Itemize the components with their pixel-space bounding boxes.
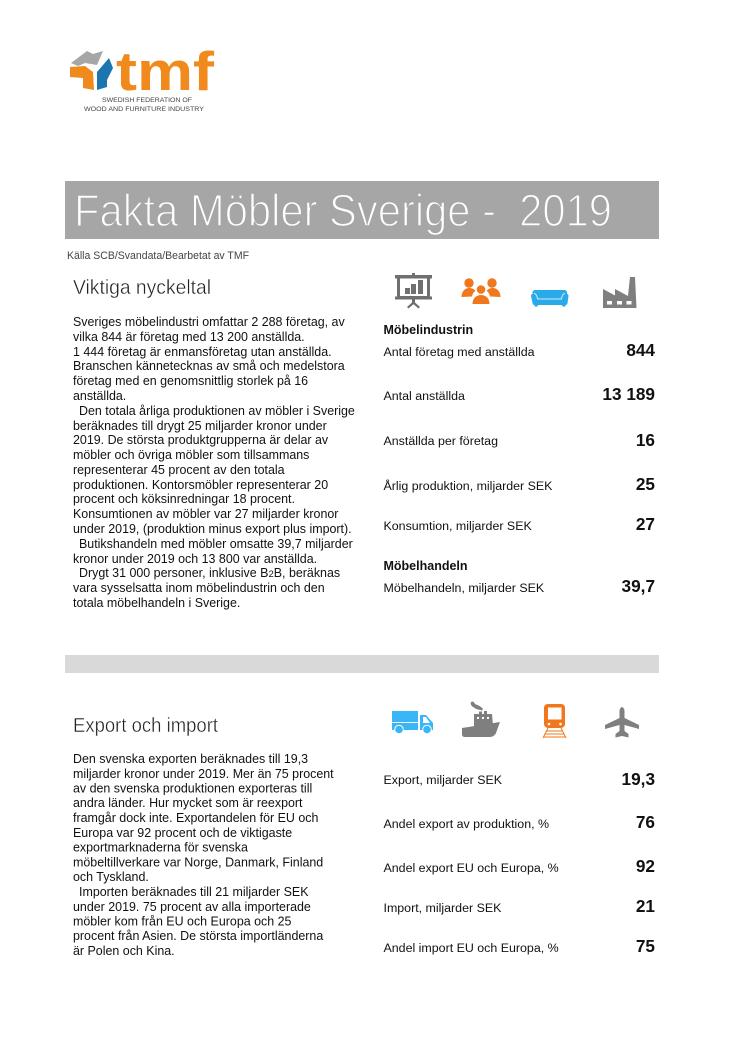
logo: tmf: tmf — [116, 40, 215, 102]
panel: export and import key figures — [384, 769, 655, 956]
heading: Export och import: Export och import — [73, 714, 218, 737]
text block: industry summary: 2019. De största produktgrupperna är delar av — [73, 433, 329, 447]
text block: industry summary: representerar 45 procent av den totala — [73, 463, 285, 477]
panel: Möbelindustrin key figures: Konsumtion, miljarder SEK — [384, 519, 532, 533]
source note: Källa SCB/Svandata/Bearbetat av TMF — [67, 250, 249, 262]
text block: industry summary: 1 444 företag är enmansföretag utan anställda. — [73, 345, 332, 359]
text block: industry summary: Sveriges möbelindustri omfattar 2 288 företag, av — [73, 315, 345, 329]
icon: train — [543, 704, 566, 738]
panel: Möbelindustrin key figures: Antal anställda — [384, 389, 465, 403]
text block: export and import summary: Den svenska exporten beräknades till 19,3 — [73, 752, 308, 766]
text block: industry summary: Den totala årliga produktionen av möbler i Sverige — [79, 404, 355, 418]
logo: tmf — [70, 40, 215, 113]
text block: industry summary: vara sysselsatta inom möbelindustrin och den — [73, 581, 325, 595]
text block: industry summary: vilka 844 är företag med 13 200 anställda. — [73, 330, 305, 344]
panel: export and import key figures: 75 — [636, 936, 655, 956]
logo: tmf: SWEDISH FEDERATION OF — [102, 97, 192, 104]
panel: export and import key figures: 21 — [636, 896, 655, 916]
text block: industry summary: procent och köksinredningar 18 procent. — [73, 492, 295, 506]
panel: Möbelindustrin key figures: 25 — [636, 474, 655, 494]
icon: presentation board — [395, 273, 432, 308]
text block: industry summary: företag med en genomsnittlig storlek på 16 — [73, 374, 308, 388]
icon: factory — [603, 277, 636, 308]
icon: people — [462, 278, 500, 304]
icon: airplane — [605, 707, 639, 738]
text block: export and import summary — [73, 752, 334, 958]
icon: ship — [462, 702, 500, 737]
panel: Möbelindustrin key figures — [384, 323, 655, 596]
text block: industry summary: under 2019, (produktion minus export plus import). — [73, 522, 352, 536]
text block: industry summary: kronor under 2019 och 13 800 var anställda. — [73, 552, 317, 566]
panel: Möbelindustrin key figures: Möbelhandeln — [384, 559, 468, 573]
heading: Viktiga nyckeltal: Viktiga nyckeltal — [73, 276, 211, 299]
text block: export and import summary: framgår dock inte. Exportandelen för EU och — [73, 811, 319, 825]
text block: export and import summary: är Polen och Kina. — [73, 944, 175, 958]
panel: export and import key figures: 19,3 — [622, 769, 655, 789]
divider band — [65, 655, 659, 673]
panel: Möbelindustrin key figures: Antal företag med anställda — [384, 345, 535, 359]
text block: export and import summary: miljarder kronor under 2019. Mer än 75 procent — [73, 767, 334, 781]
logo: tmf: WOOD AND FURNITURE INDUSTRY — [84, 106, 204, 113]
panel: Möbelindustrin key figures: Årlig produktion, miljarder SEK — [384, 478, 553, 493]
text block: industry summary: Konsumtionen av möbler var 27 miljarder kronor — [73, 507, 338, 521]
panel: export and import key figures: Andel import EU och Europa, % — [384, 941, 559, 955]
panel: export and import key figures: Import, miljarder SEK — [384, 901, 502, 915]
text block: industry summary: möbler och övriga möbler som tillsammans — [73, 448, 309, 462]
text block: industry summary: anställda. — [73, 389, 126, 403]
panel: export and import key figures: Export, miljarder SEK — [384, 773, 503, 787]
panel: Möbelindustrin key figures: 27 — [636, 514, 655, 534]
text block: industry summary: produktionen. Kontorsmöbler representerar 20 — [73, 478, 328, 492]
text block: industry summary — [73, 315, 355, 610]
panel: export and import key figures: 76 — [636, 812, 655, 832]
text block: industry summary: totala möbelhandeln i Sverige. — [73, 596, 240, 610]
panel: Möbelindustrin key figures: Möbelindustrin — [384, 323, 473, 337]
text block: industry summary: Drygt 31 000 personer, inklusive B2B, beräknas — [79, 566, 340, 580]
text block: export and import summary: Importen beräknades till 21 miljarder SEK — [79, 885, 309, 899]
text block: export and import summary: under 2019. 75 procent av alla importerade — [73, 900, 311, 914]
text block: industry summary: beräknades till drygt 25 miljarder kronor under — [73, 419, 327, 433]
panel: export and import key figures: 92 — [636, 856, 655, 876]
text block: export and import summary: procent från Asien. De största importländerna — [73, 929, 323, 943]
text block: export and import summary: Europa var 92 procent och de viktigaste — [73, 826, 292, 840]
icon: sofa — [531, 290, 568, 306]
panel: Möbelindustrin key figures: 13 189 — [602, 384, 655, 404]
panel: Möbelindustrin key figures: 16 — [636, 430, 655, 450]
panel: Möbelindustrin key figures: Anställda per företag — [384, 434, 498, 448]
panel: Möbelindustrin key figures: Möbelhandeln, miljarder SEK — [384, 581, 545, 595]
panel: Möbelindustrin key figures: 844 — [626, 340, 655, 360]
panel: Möbelindustrin key figures: 39,7 — [622, 576, 655, 596]
title banner: Fakta Möbler Sverige - 2019 — [74, 185, 612, 236]
text block: export and import summary: exportmarknaderna för svenska — [73, 840, 248, 854]
icon: truck — [392, 711, 433, 734]
text block: industry summary: Branschen kännetecknas av små och medelstora — [73, 359, 345, 373]
text block: industry summary: Butikshandeln med möbler omsatte 39,7 miljarder — [79, 537, 353, 551]
panel: export and import key figures: Andel export EU och Europa, % — [384, 861, 559, 875]
text block: export and import summary: och Tyskland. — [73, 870, 149, 884]
panel: export and import key figures: Andel export av produktion, % — [384, 817, 549, 831]
text block: export and import summary: av den svenska produktionen exporteras till — [73, 782, 312, 796]
text block: export and import summary: möbler kom från EU och Europa och 25 — [73, 914, 292, 928]
text block: export and import summary: andra länder. Hur mycket som är reexport — [73, 796, 303, 810]
text block: export and import summary: möbeltillverkare var Norge, Danmark, Finland — [73, 856, 323, 870]
